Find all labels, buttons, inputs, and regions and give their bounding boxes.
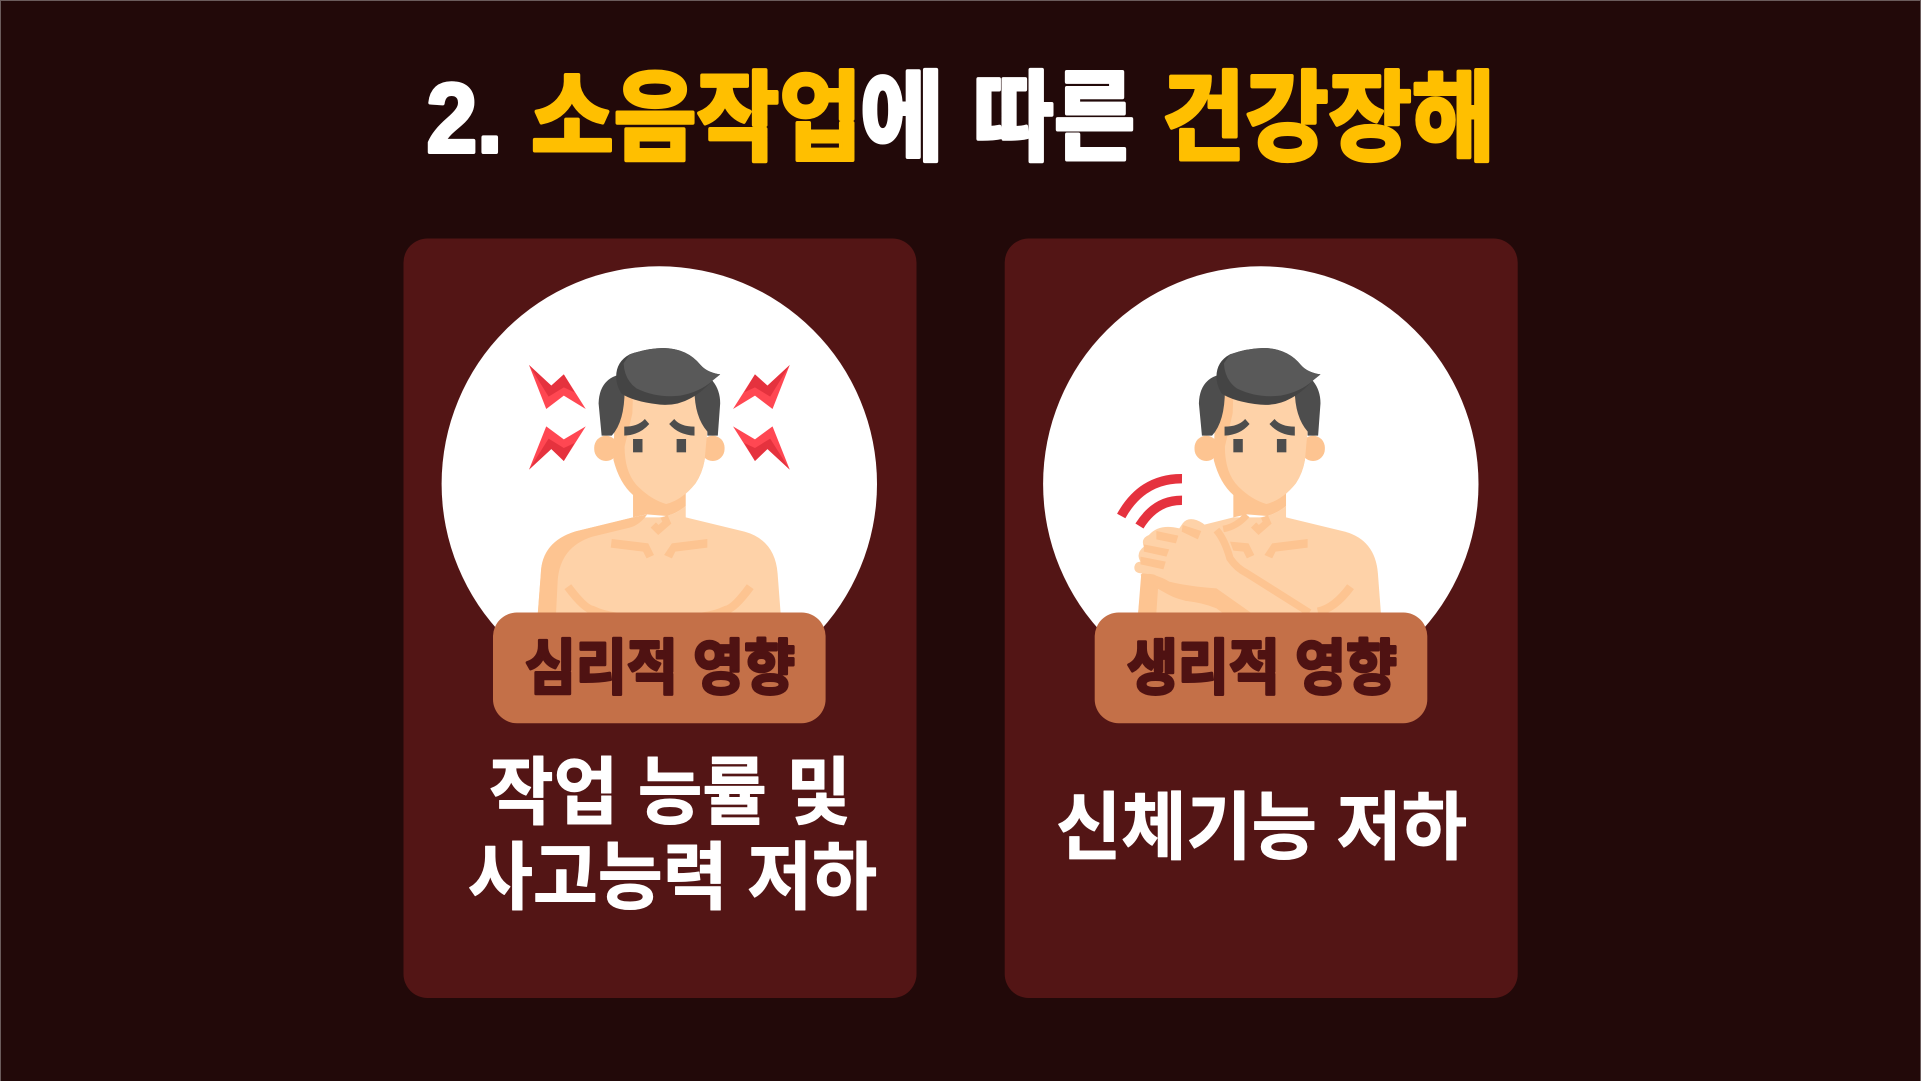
icon: hand on shoulder [1134, 519, 1309, 613]
text: work efficiency: 사고능력 저하 [468, 836, 877, 919]
badge: 생리적 영향: 생리적 영향 [1127, 635, 1397, 702]
icon: man holding shoulder [1043, 266, 1479, 702]
title: 에 [860, 63, 944, 173]
title [426, 63, 1495, 173]
icon: pain waves [1121, 479, 1182, 526]
text: work efficiency [468, 751, 877, 919]
icon: lightning bolts [529, 365, 790, 470]
text: body function: 신체기능 저하 [1056, 786, 1467, 869]
title: 소음작업 [531, 63, 862, 173]
panel: physiological effects [1005, 238, 1518, 998]
badge: 심리적 영향 [493, 612, 826, 723]
title: 2. [426, 63, 502, 173]
text: work efficiency: 작업 능률 및 [489, 751, 851, 834]
badge: 생리적 영향 [1095, 612, 1427, 723]
icon: man with headache [442, 266, 877, 702]
panel: psychological effects [404, 238, 916, 998]
badge: 심리적 영향: 심리적 영향 [525, 635, 795, 702]
title: 건강장해 [1162, 63, 1495, 173]
title: 따른 [973, 63, 1135, 173]
